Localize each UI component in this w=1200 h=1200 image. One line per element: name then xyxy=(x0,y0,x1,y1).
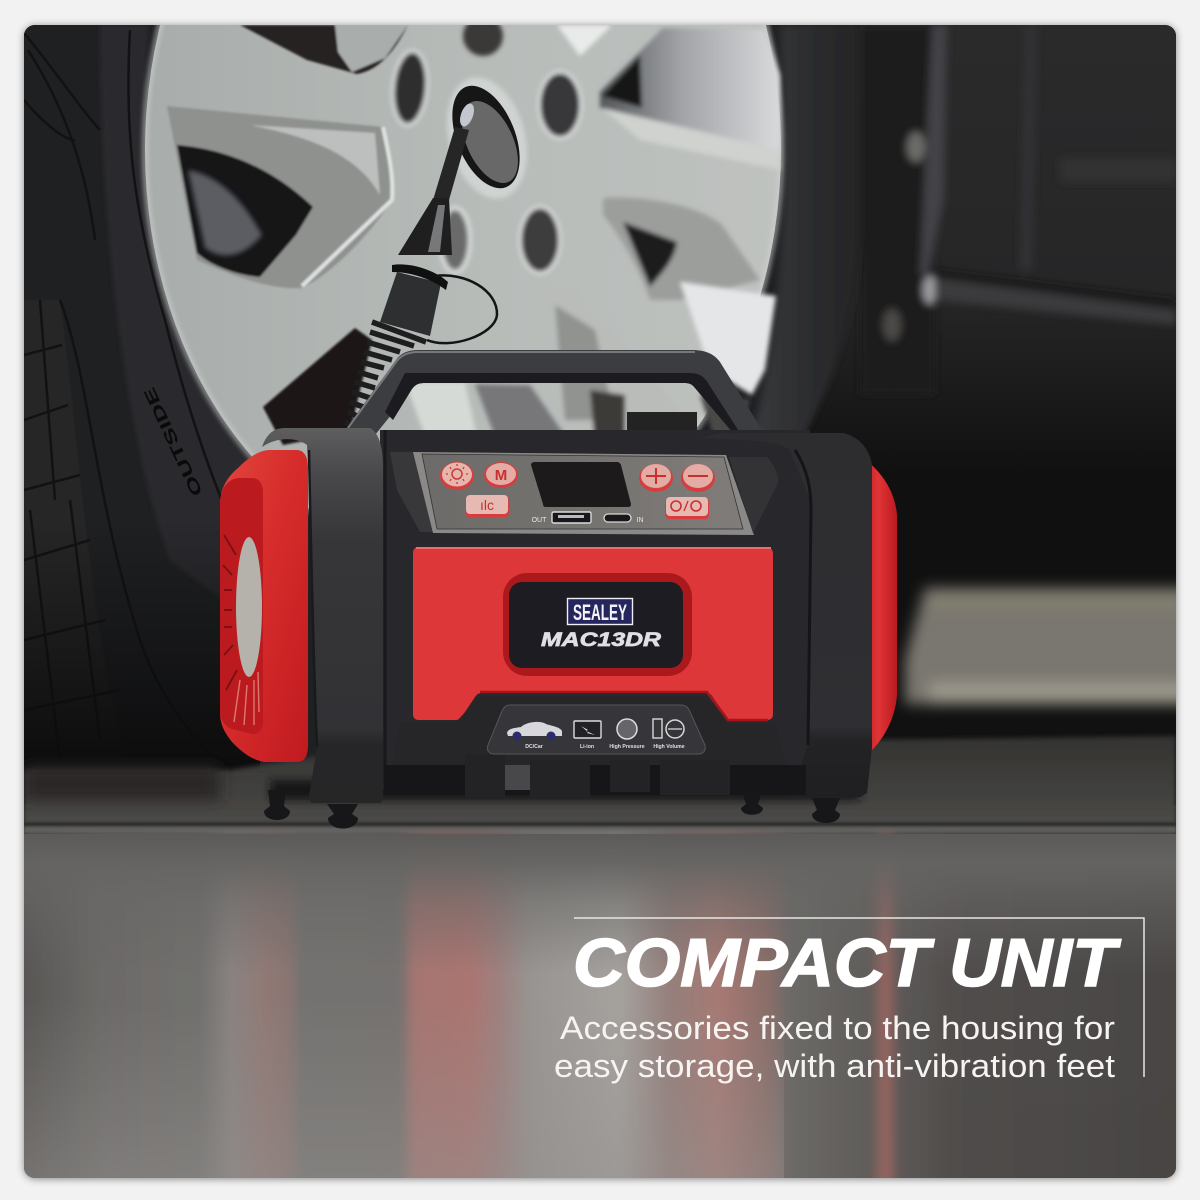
label recess xyxy=(503,573,692,676)
display screen xyxy=(531,462,631,507)
USB-C in port: IN xyxy=(636,517,644,524)
button: light xyxy=(440,462,474,490)
carrying handle xyxy=(346,350,759,434)
USB out port xyxy=(532,512,591,524)
description text: easy storage, with anti-vibration feet xyxy=(554,1048,1115,1084)
USB out port: OUT xyxy=(532,517,547,524)
coiled spring xyxy=(345,322,426,428)
tyre tread xyxy=(24,30,221,675)
button: plus xyxy=(639,464,673,492)
left end cap xyxy=(262,428,385,803)
badge captions: High Pressure xyxy=(609,744,645,750)
icon: volume xyxy=(653,719,662,738)
background: car body xyxy=(24,25,1190,805)
description text xyxy=(554,1010,1115,1084)
model name: MAC13DR xyxy=(541,630,661,651)
button: power xyxy=(665,497,709,519)
heading: COMPACT UNIT xyxy=(573,925,1122,1001)
vent lines xyxy=(223,535,237,690)
icon: battery xyxy=(574,721,601,738)
tyre sidewall text: OUTSIDE xyxy=(141,384,207,498)
lower right window xyxy=(545,197,776,445)
upper right window xyxy=(557,25,780,170)
button: inflate mode: ılc xyxy=(480,497,494,513)
shadow under compressor xyxy=(270,780,860,800)
tyre shadow xyxy=(24,580,260,771)
wheel rim shade xyxy=(139,25,787,516)
blurred light band xyxy=(905,588,1190,704)
control panel dark right wedge xyxy=(729,457,778,533)
lower centre spokes xyxy=(408,383,564,430)
body bevel beside panel xyxy=(390,452,434,532)
control panel xyxy=(413,452,778,535)
lower left window xyxy=(263,328,372,445)
floor carpet strip xyxy=(24,736,1176,840)
button: M xyxy=(484,462,518,488)
SEALEY logo: SEALEY xyxy=(573,600,627,625)
tyre xyxy=(24,25,862,800)
alloy wheel xyxy=(139,25,787,516)
compressor unit xyxy=(220,428,897,828)
right red end pad xyxy=(872,465,897,750)
icon: car xyxy=(507,722,562,736)
USB-C in port xyxy=(604,514,644,524)
caption frame xyxy=(574,918,1144,1077)
lower body strip xyxy=(384,696,806,797)
air hose and nozzle xyxy=(345,102,497,428)
anti-vibration feet xyxy=(264,790,840,828)
button: minus xyxy=(681,464,715,492)
model plate xyxy=(509,582,683,668)
button: M: M xyxy=(495,467,507,484)
badge captions: Li-ion xyxy=(580,744,594,750)
lug holes xyxy=(390,16,581,273)
badge captions xyxy=(525,744,685,750)
button: inflate mode xyxy=(465,495,509,517)
icon: pressure gauge xyxy=(617,719,637,739)
pad recess xyxy=(220,478,263,734)
badge captions: High Volume xyxy=(653,744,685,750)
hose storage block xyxy=(627,412,697,430)
left red end pad xyxy=(220,450,308,762)
centre cap xyxy=(446,76,528,200)
description text: Accessories fixed to the housing for xyxy=(560,1010,1115,1046)
red front panel xyxy=(413,547,773,720)
right end cap xyxy=(794,433,872,797)
main body xyxy=(380,430,810,790)
left window xyxy=(167,106,394,288)
top windows xyxy=(240,25,408,74)
SEALEY logo xyxy=(568,598,632,625)
lamp lens xyxy=(236,537,262,677)
feature badge xyxy=(487,705,705,754)
badge captions: DC/Car xyxy=(525,744,543,750)
glossy floor reflections xyxy=(0,834,1200,1200)
